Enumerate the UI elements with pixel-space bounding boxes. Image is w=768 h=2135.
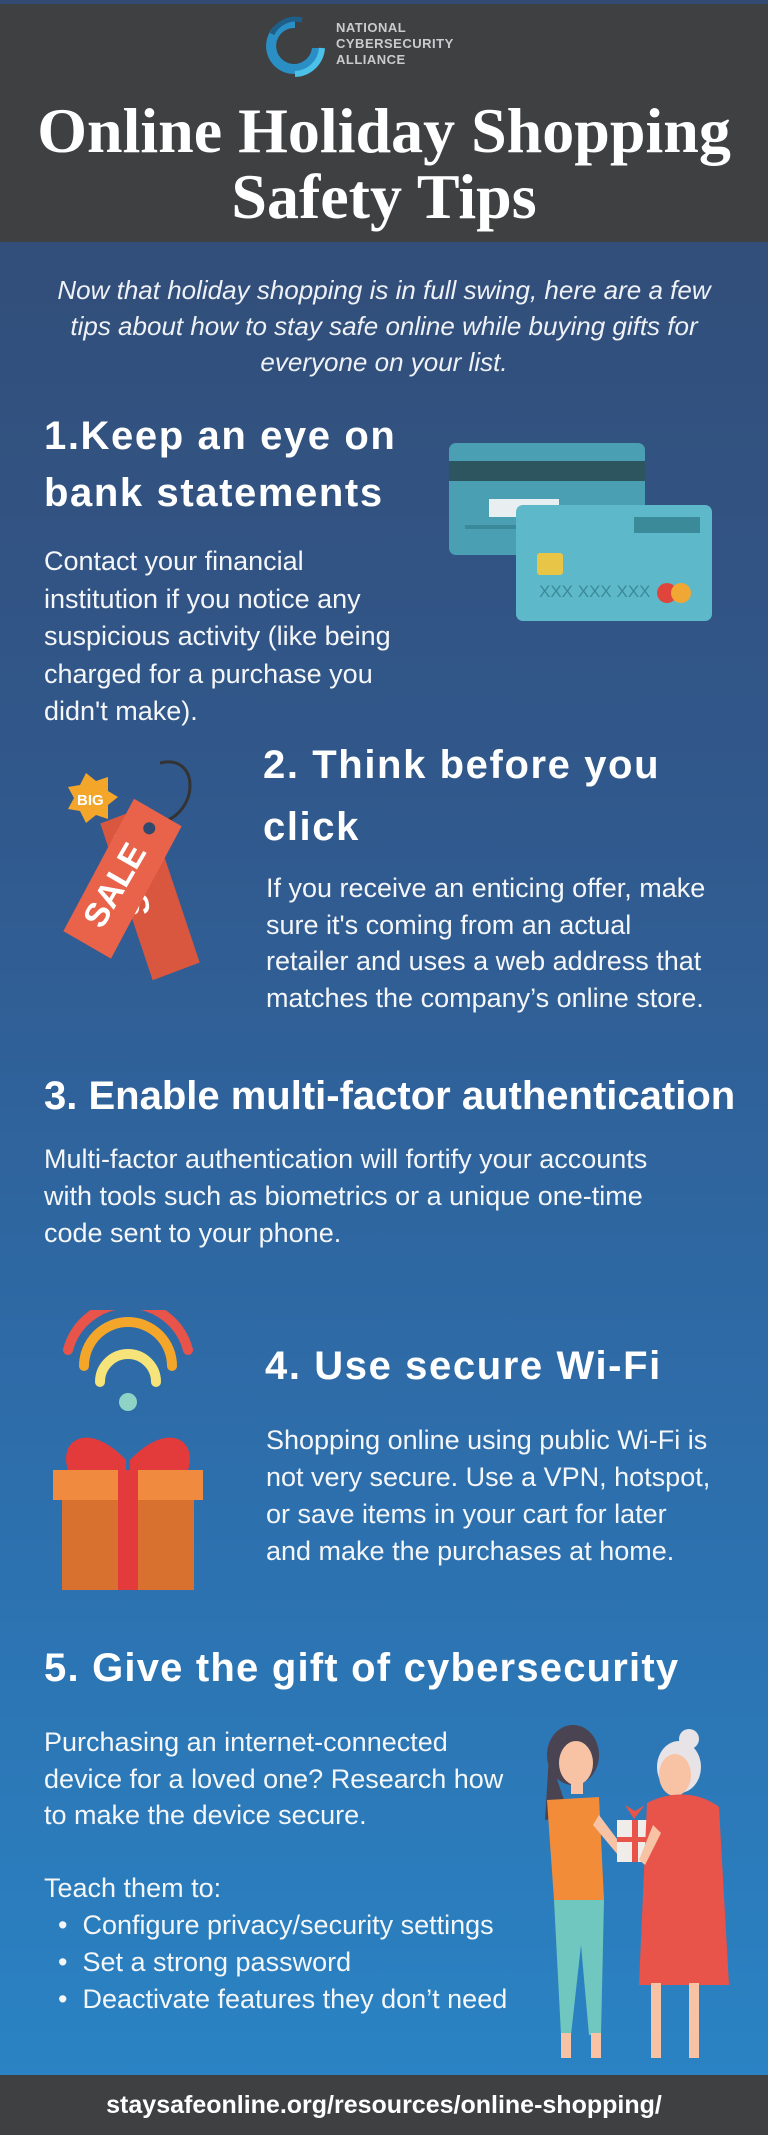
panel: tip 5 [44, 1646, 729, 2058]
teach list: • Configure privacy/security settings [58, 1910, 494, 1940]
body 3: code sent to your phone. [44, 1218, 341, 1248]
intro text: Now that holiday shopping is in full swing, here are a few [57, 275, 711, 305]
heading 3: 3. Enable multi-factor authentication [44, 1074, 735, 1118]
heading 2 [263, 743, 660, 849]
logo text: NATIONAL [336, 20, 406, 35]
body 2: sure it's coming from an actual [266, 910, 631, 940]
body 1: didn't make). [44, 696, 198, 726]
body 2 [266, 873, 705, 1012]
heading 2: 2. Think before you [263, 743, 660, 787]
body 2: retailer and uses a web address that [266, 946, 701, 976]
panel: tip 2 [63, 743, 705, 1012]
footer url: staysafeonline.org/resources/online-shopping/ [106, 2091, 662, 2119]
teach list: Teach them to: [44, 1873, 221, 1903]
illustration: two women with gift [545, 1725, 729, 2058]
body 4: or save items in your cart for later [266, 1499, 667, 1529]
body 4: and make the purchases at home. [266, 1536, 674, 1566]
logo text: CYBERSECURITY [336, 36, 454, 51]
panel: tip 1 [44, 414, 712, 726]
body 3: Multi-factor authentication will fortify your accounts [44, 1144, 647, 1174]
logo text [336, 20, 454, 67]
body 1: charged for a purchase you [44, 658, 373, 688]
intro text [57, 275, 712, 377]
body 4: not very secure. Use a VPN, hotspot, [266, 1462, 710, 1492]
teach list [44, 1873, 507, 2014]
intro text: tips about how to stay safe online while buying gifts for [70, 311, 698, 341]
logo [266, 16, 454, 77]
body 1: suspicious activity (like being [44, 621, 391, 651]
body 2: matches the company’s online store. [266, 982, 704, 1012]
heading 1: bank statements [44, 471, 384, 515]
body 1: institution if you notice any [44, 584, 361, 614]
teach list: • Deactivate features they don’t need [58, 1984, 507, 2014]
heading 4: 4. Use secure Wi-Fi [265, 1344, 662, 1388]
footer bar [0, 2075, 768, 2135]
heading 5: 5. Give the gift of cybersecurity [44, 1646, 679, 1690]
header band [0, 4, 768, 242]
body 3: with tools such as biometrics or a unique one-time [44, 1181, 643, 1211]
body 4 [266, 1425, 710, 1566]
icon: sale tags: BIG [77, 792, 104, 809]
heading 2: click [263, 805, 360, 849]
body 4: Shopping online using public Wi-Fi is [266, 1425, 707, 1455]
body 5 [44, 1727, 504, 1830]
icon: credit cards: XXX XXX XXX [539, 582, 650, 601]
heading 1: 1.Keep an eye on [44, 414, 396, 458]
body 2: If you receive an enticing offer, make [266, 873, 705, 903]
body 3 [44, 1144, 647, 1248]
teach list: • Set a strong password [58, 1947, 351, 1977]
title [37, 95, 731, 232]
icon: wifi gift [53, 1310, 203, 1590]
body 5: Purchasing an internet-connected [44, 1727, 448, 1757]
title: Safety Tips [231, 161, 537, 232]
panel: tip 4 [53, 1310, 710, 1590]
body 5: to make the device secure. [44, 1800, 367, 1830]
intro text: everyone on your list. [260, 347, 508, 377]
heading 1 [44, 414, 396, 515]
icon: sale tags: SALE [107, 828, 157, 919]
icon: logo swirl [266, 16, 325, 77]
logo text: ALLIANCE [336, 52, 406, 67]
body 1 [44, 546, 391, 726]
title: Online Holiday Shopping [37, 95, 731, 166]
body 1: Contact your financial [44, 546, 304, 576]
icon: sale tags: SALE [76, 837, 154, 934]
icon: credit cards [449, 443, 712, 621]
icon: sale tags [63, 760, 200, 980]
body 5: device for a loved one? Research how [44, 1764, 503, 1794]
panel: tip 3 [44, 1074, 735, 1248]
